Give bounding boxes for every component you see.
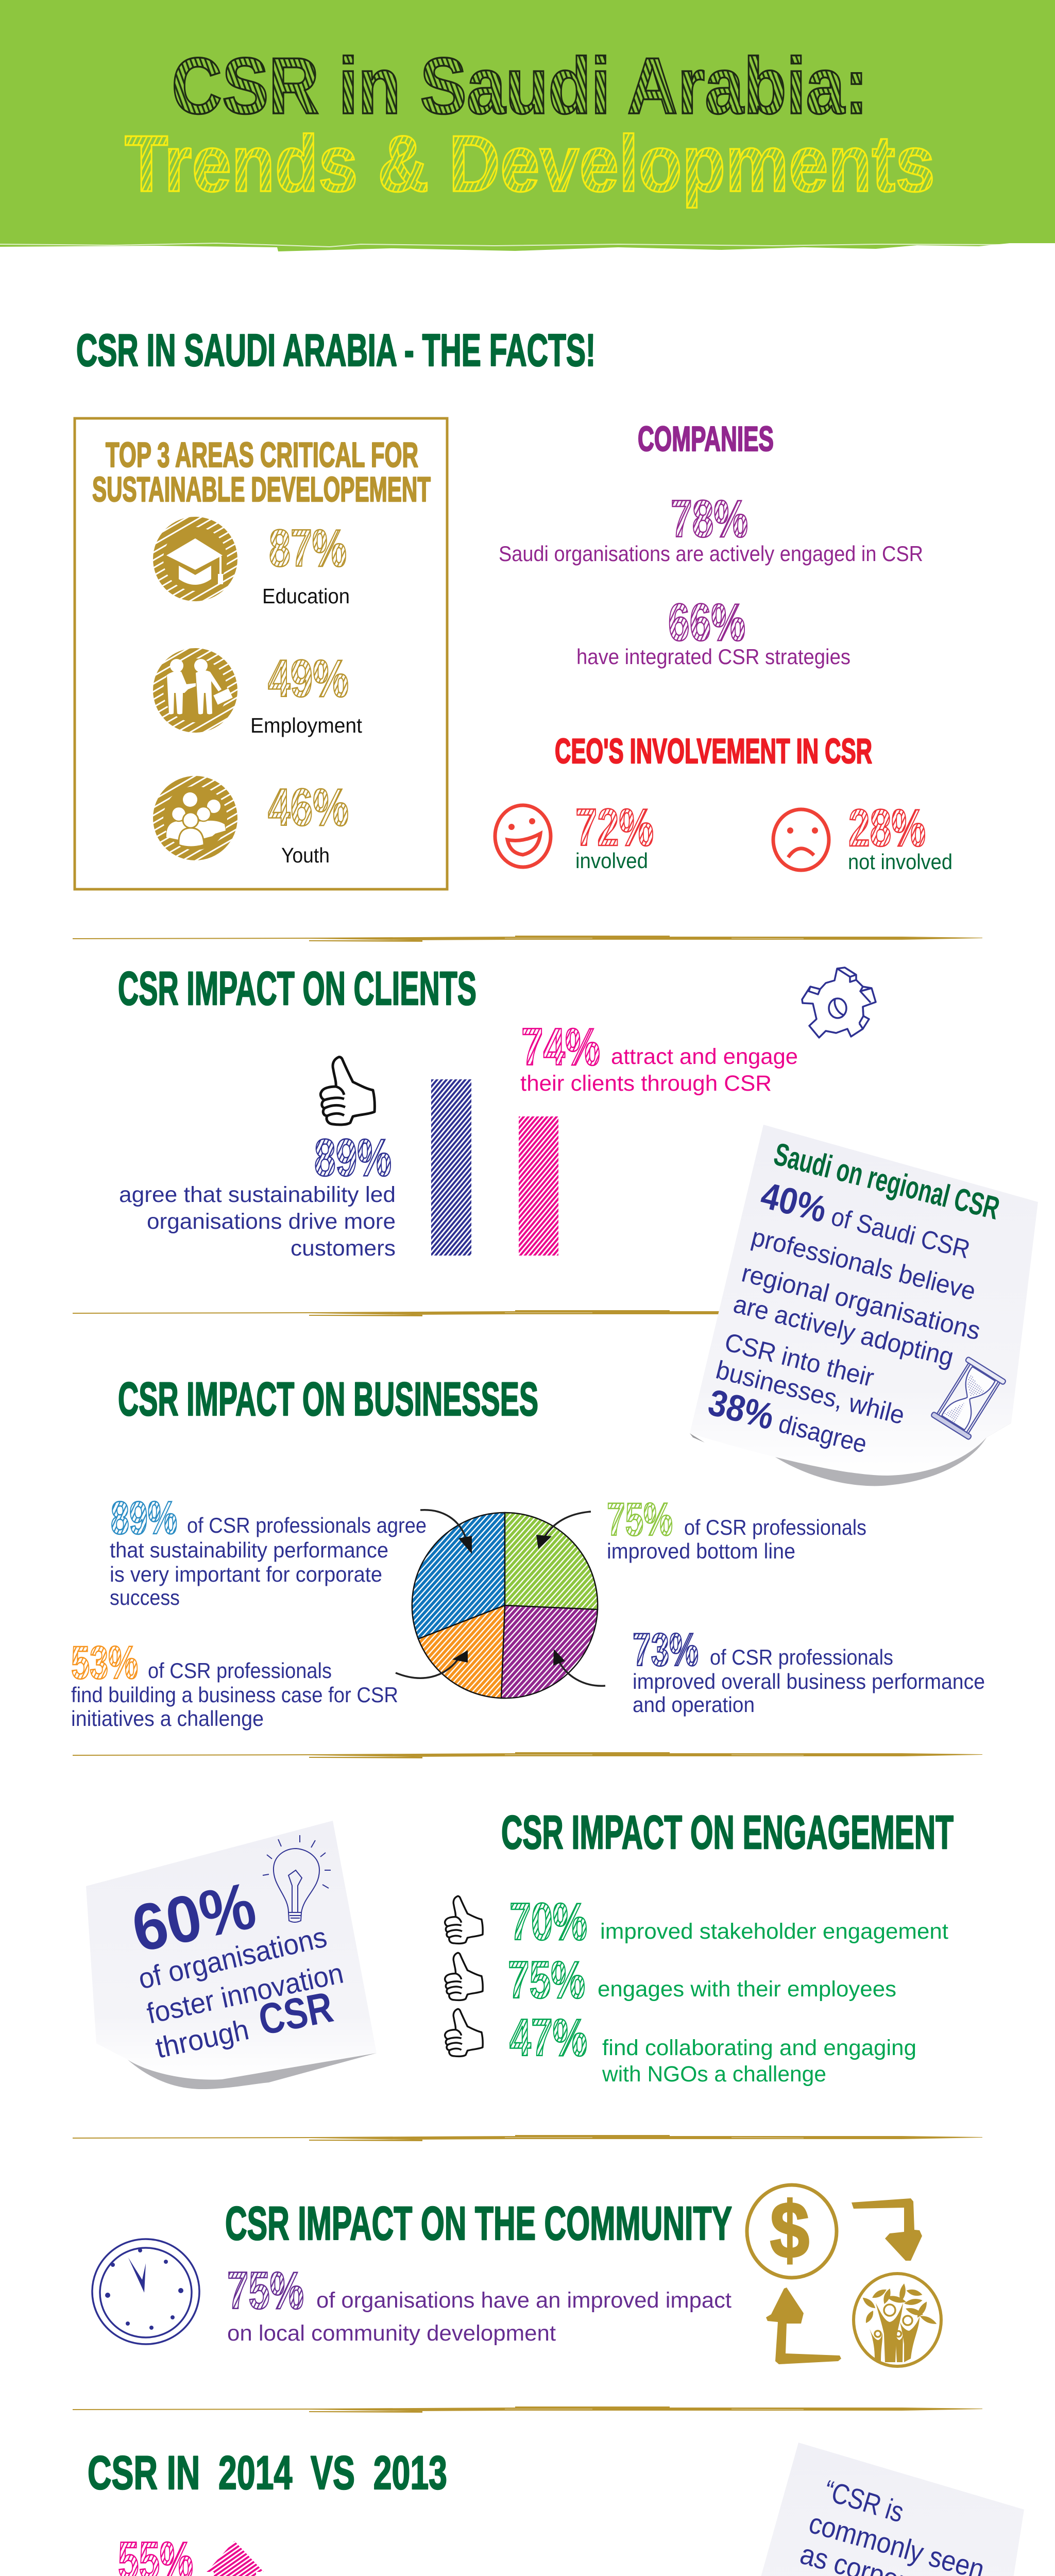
- note text: professionals believe: [748, 1222, 979, 1306]
- title line 1: CSR in Saudi Arabia:: [172, 41, 868, 130]
- stat: 87%: 87%: [269, 519, 347, 578]
- note text: businesses, while: [713, 1355, 908, 1430]
- note text: regional organisations: [739, 1258, 983, 1346]
- stat: 78%: 78%: [671, 489, 748, 548]
- panel: CEO involvement: [495, 732, 952, 874]
- stat: 49%: 49%: [268, 649, 349, 708]
- arrow: left then up: [766, 2287, 841, 2364]
- text: sustainability led: agree that sustainability led: [119, 1182, 396, 1207]
- text: NGOs: find collaborating and engaging: [602, 2036, 916, 2060]
- stat: 75% purple: 75%: [227, 2261, 304, 2320]
- text: employees: engages with their employees: [598, 1977, 896, 2002]
- text: actively engaged: Saudi organisations are actively engaged in CSR: [499, 541, 923, 566]
- note text: 40%: [757, 1175, 831, 1230]
- note text: of Saudi CSR: [828, 1202, 973, 1264]
- note: corporate philanthropy: [734, 2443, 1024, 2576]
- note text: “CSR is: [820, 2473, 908, 2529]
- slice: blue: [412, 1513, 505, 1639]
- stat: 75%: 75%: [508, 1951, 585, 2009]
- note text: [704, 1175, 983, 1461]
- bar: 89%: [431, 1079, 471, 1256]
- chart: client bars: [431, 1079, 558, 1256]
- note text: 60%: [126, 1869, 262, 1966]
- stat: 46%: 46%: [268, 778, 349, 837]
- note text: 38%: [704, 1382, 778, 1437]
- panel heading: [92, 435, 431, 509]
- icon: money to community cycle: [747, 2185, 941, 2366]
- text: business case: [71, 1658, 398, 1731]
- slice: green: [505, 1513, 598, 1609]
- CEO heading: CEO'S INVOLVEMENT IN CSR: [555, 732, 872, 771]
- stat: 74%: 74%: [521, 1018, 600, 1076]
- note: 60% innovation: [86, 1821, 377, 2089]
- icon: hourglass: [931, 1357, 1006, 1440]
- panel: companies: [499, 419, 923, 669]
- text: corporate success: that sustainability performance: [110, 1538, 388, 1562]
- label: youth: Youth: [281, 843, 330, 867]
- section heading: businesses: CSR IMPACT ON BUSINESSES: [118, 1373, 538, 1426]
- text: overall performance: of CSR professionals: [710, 1645, 893, 1669]
- text: attract clients: attract and engage: [611, 1044, 798, 1069]
- text: corporate success: of CSR professionals agree: [187, 1513, 427, 1537]
- note text: CSR into their: [722, 1327, 877, 1392]
- icon: light bulb: [263, 1835, 331, 1922]
- arrow: up: [207, 2541, 264, 2576]
- text: corporate success: is very important for corporate: [110, 1562, 382, 1586]
- text: overall performance: improved overall business performance: [633, 1669, 985, 1693]
- title line 2: Trends & Developments: [125, 119, 935, 208]
- note text: [126, 1869, 346, 2064]
- icon: thumbs up: [445, 1896, 483, 1943]
- icon: community tree: [854, 2274, 941, 2366]
- stat: 70%: 70%: [509, 1892, 587, 1951]
- icon: dollar coin: $: [770, 2185, 809, 2275]
- icon: sad face: [773, 809, 829, 870]
- stat: 72%: 72%: [575, 798, 654, 857]
- text: business case: of CSR professionals: [148, 1658, 332, 1683]
- note: Saudi on regional CSR: [690, 1125, 1038, 1486]
- note text: of organisations: [135, 1920, 330, 1995]
- note text: CSR: [254, 1982, 337, 2044]
- list: engagement stats: [508, 1892, 948, 2087]
- note text: foster innovation: [144, 1956, 346, 2030]
- panel heading: SUSTAINABLE DEVELOPEMENT: [92, 470, 431, 509]
- callout: 89% important: [110, 1493, 427, 1609]
- companies heading: COMPANIES: [638, 419, 774, 459]
- text: bottom line: of CSR professionals: [684, 1515, 866, 1539]
- slice: orange: [418, 1605, 505, 1698]
- callout: 74% clients: [520, 1018, 798, 1096]
- label: involved: involved: [575, 849, 648, 873]
- text: corporate success: [110, 1513, 427, 1609]
- icon: thumbs up: [445, 2009, 483, 2056]
- icon: thumbs up: [320, 1057, 375, 1125]
- panel heading: TOP 3 AREAS CRITICAL FOR: [106, 435, 418, 474]
- header banner: [0, 0, 1055, 251]
- note text: through: [152, 2013, 251, 2064]
- icon: happy face: [495, 805, 551, 867]
- section heading: clients: CSR IMPACT ON CLIENTS: [118, 962, 477, 1015]
- arrow: right then down: [852, 2198, 922, 2261]
- callout: 53% business case: [71, 1637, 398, 1731]
- text: local community: [227, 2288, 731, 2346]
- note text: disagree: [776, 1409, 870, 1459]
- text: overall performance: [633, 1645, 985, 1717]
- icon: employment: [153, 648, 237, 733]
- stat: 75% green: 75%: [607, 1494, 673, 1546]
- text: attract clients: [520, 1044, 798, 1096]
- stat: 66%: 66%: [668, 593, 745, 652]
- chart: business pie: [396, 1510, 605, 1698]
- section heading: community: CSR IMPACT ON THE COMMUNITY: [225, 2197, 732, 2250]
- section heading: the facts: CSR IN SAUDI ARABIA - THE FACTS!: [76, 325, 595, 376]
- bar: 74%: [519, 1116, 558, 1256]
- icon: education: [153, 517, 237, 601]
- text: bottom line: improved bottom line: [607, 1539, 795, 1563]
- text: sustainability led: customers: [291, 1236, 396, 1261]
- text: bottom line: [607, 1515, 866, 1563]
- stat: 73% indigo: 73%: [633, 1624, 699, 1676]
- stat: 28%: 28%: [848, 799, 926, 857]
- panel: top 3 areas: [75, 418, 447, 889]
- text: corporate success: success: [110, 1585, 180, 1609]
- stat: 89%: 89%: [314, 1128, 392, 1187]
- callout: 89% sustainability: [119, 1128, 396, 1261]
- text: local community: on local community development: [227, 2321, 556, 2346]
- text: integrated strategies: have integrated CSR strategies: [576, 645, 850, 669]
- text: business case: initiatives a challenge: [71, 1706, 264, 1731]
- label: education: Education: [262, 584, 350, 608]
- label: not involved: not involved: [848, 850, 952, 874]
- text: NGOs: [602, 2036, 916, 2087]
- section heading: 2014 vs 2013: CSR IN 2014 VS 2013: [88, 2447, 447, 2499]
- stat: 47%: 47%: [509, 2008, 587, 2067]
- text: sustainability led: [119, 1182, 396, 1261]
- note text: are actively adopting: [730, 1289, 957, 1372]
- text: overall performance: and operation: [633, 1692, 755, 1717]
- stat: 89% blue: 89%: [111, 1493, 177, 1544]
- slice: purple: [501, 1605, 598, 1698]
- label: employment: Employment: [250, 714, 363, 737]
- text: local community: of organisations have an improved impact: [316, 2288, 731, 2313]
- callout: community development: [227, 2261, 731, 2346]
- callout: 73% performance: [633, 1624, 985, 1717]
- text: stakeholder: improved stakeholder engagement: [600, 1919, 948, 1944]
- icon: thumbs up: [445, 1953, 483, 2000]
- text: attract clients: their clients through CSR: [520, 1071, 772, 1096]
- callout: 75% bottom line: [607, 1494, 866, 1563]
- text: sustainability led: organisations drive more: [147, 1209, 396, 1234]
- pie arrows: [396, 1510, 605, 1686]
- icon: youth: [153, 776, 237, 860]
- text: business case: find building a business case for CSR: [71, 1683, 398, 1707]
- icon: clock: [92, 2239, 199, 2344]
- stat group: social ROI: [64, 2531, 376, 2576]
- icon: gear: [802, 968, 876, 1038]
- text: NGOs: with NGOs a challenge: [602, 2062, 826, 2087]
- note text: [774, 2473, 988, 2576]
- icon: dollar coin: [747, 2185, 837, 2278]
- stat: 53% orange: 53%: [71, 1637, 138, 1689]
